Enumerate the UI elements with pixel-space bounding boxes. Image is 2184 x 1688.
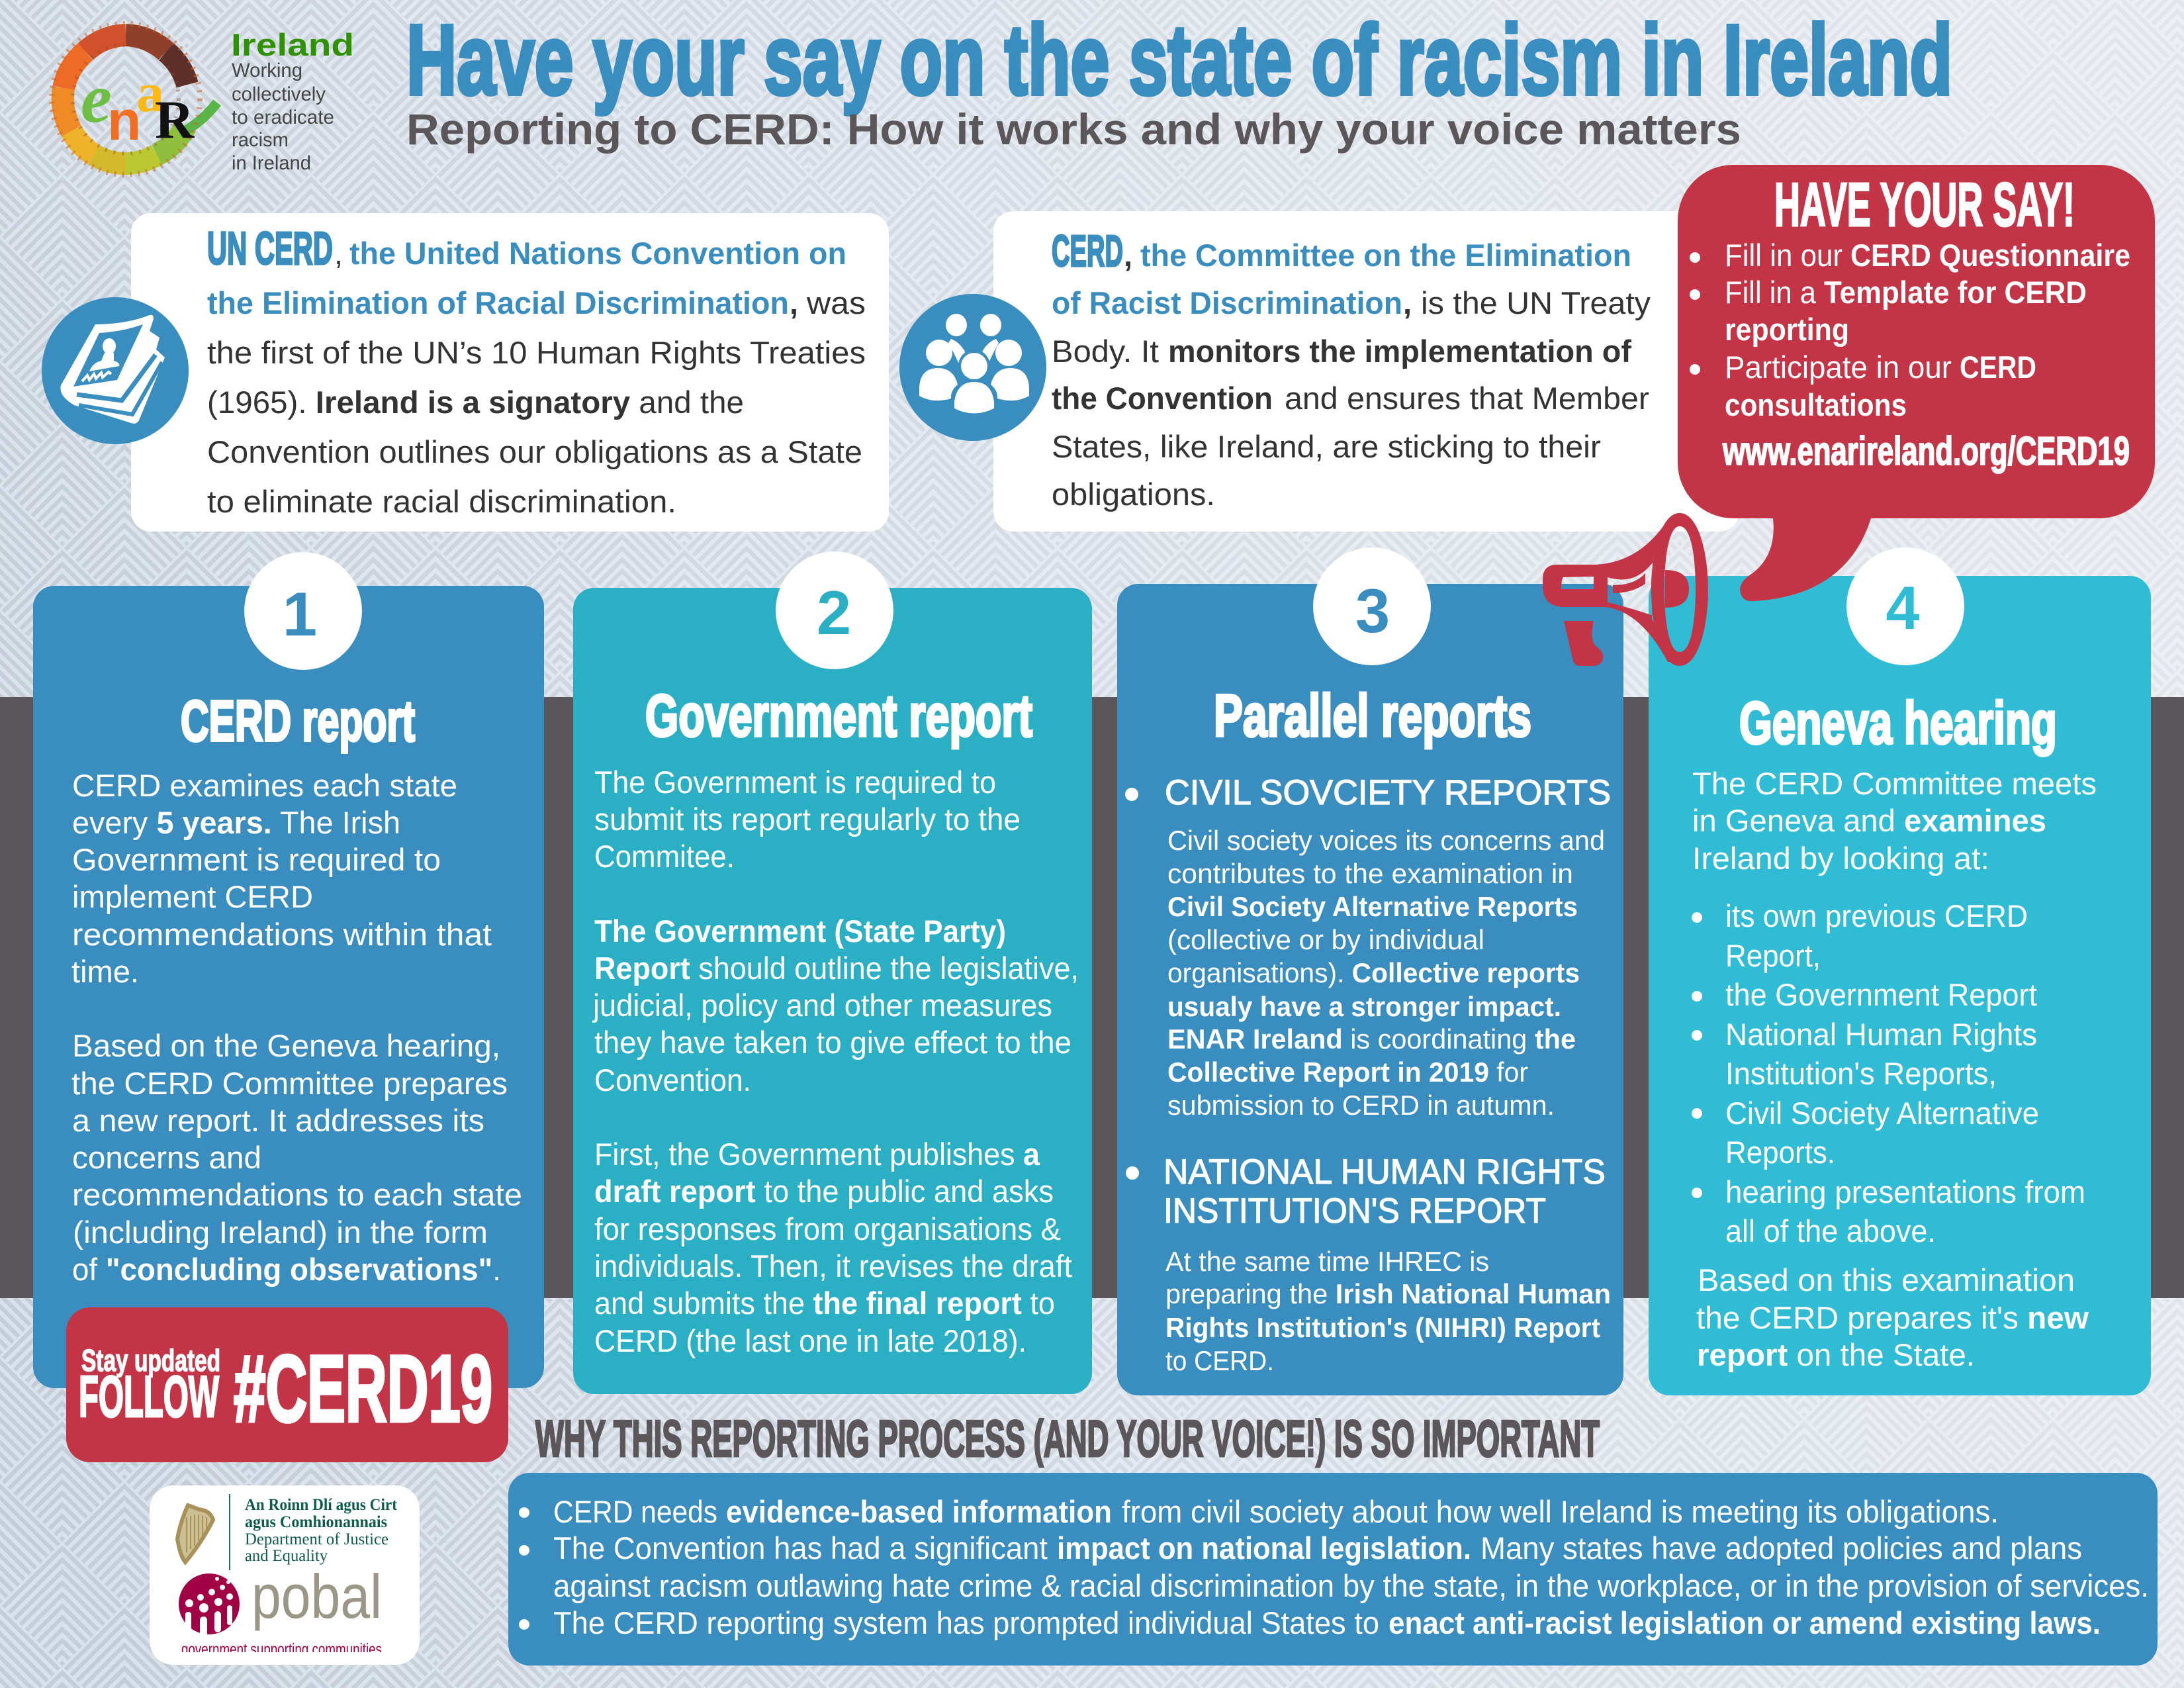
number badge 1: 1 [283,579,317,649]
panel: CERD committee intro: States, like Ireland, are sticking to their [1052,429,1601,464]
icon: harp [177,1505,213,1562]
heading: CERD report: CERD report [181,689,415,753]
text: Department of Justice and Equality: An Roinn Dlí agus Cirt [245,1496,398,1514]
text: Government report body: Report should outline the legislative, [594,951,1079,986]
panel: UN CERD intro: Convention outlines our obligations as a State [207,434,862,469]
panel 2: Government report [573,588,1092,1394]
text: Geneva outcome: report on the State. [1697,1337,1975,1372]
list: what is examined: the Government Report [1725,977,2037,1012]
logo: ENAR Ireland [52,24,354,175]
list: what is examined: all of the above. [1725,1213,1936,1248]
text: CERD report body: Based on the Geneva hearing, [72,1028,500,1063]
panel: CERD committee intro: CERD [1052,226,1123,276]
panel: CERD committee intro: Body. It [1052,334,1159,369]
panel: UN CERD intro: , [790,285,798,320]
panel: why it is important: against racism outlawing hate crime & racial discrimination by the state, in the workplace, or in the provision of services. [553,1568,2149,1603]
number badge 4: 4 [1886,575,1920,642]
text: civil society reports: usualy have a stronger impact. [1167,991,1561,1022]
logo letters [81,60,195,152]
text: Geneva intro [1692,766,2097,876]
panel: why it is important: impact on national legislation. [1057,1530,1471,1566]
callout: have your say speech bubble: Fill in a [1725,275,1817,310]
icon: megaphone [1543,513,1708,666]
text: Department of Justice and Equality: and Equality [245,1547,328,1565]
panel: UN CERD intro: the first of the UN’s 10 Human Rights Treaties [207,335,866,370]
panel: CERD committee intro: the Convention [1052,381,1273,416]
text: Government report body: draft report to the public and asks [594,1174,1054,1209]
callout: follow #CERD19: Stay updated [81,1343,220,1378]
panel 4: Geneva hearing [1649,576,2151,1395]
text: national human rights institution report: NATIONAL HUMAN RIGHTS [1163,1152,1606,1192]
panel: CERD committee intro: obligations. [1052,477,1215,512]
text: national human rights institution report: INSTITUTION'S REPORT [1163,1192,1546,1231]
text: CERD report body: (including Ireland) in the form [73,1215,488,1250]
callout: follow #CERD19: FOLLOW [79,1364,219,1429]
icon: pobal emblem [179,1573,240,1636]
heading: Parallel reports: Parallel reports [1214,683,1531,749]
text: Government report body: and submits the the final report to [594,1286,1055,1321]
text: Government report body [592,765,1079,1358]
text: Government report body: The Government (State Party) [594,914,1006,949]
panel: CERD committee intro: , [1403,285,1412,320]
text: civil society reports: ENAR Ireland is coordinating the [1167,1023,1576,1055]
text: civil society reports: submission to CERD in autumn. [1167,1090,1555,1121]
text: Geneva outcome [1696,1262,2089,1372]
callout: have your say speech bubble: consultations [1725,387,1907,422]
text: Government report body: First, the Government publishes a [594,1137,1040,1172]
list: what is examined: hearing presentations from [1725,1174,2085,1209]
text: civil society reports: CIVIL SOVCIETY REPORTS [1165,773,1611,812]
logo wordmark: Working [232,60,302,81]
text: national human rights institution report: At the same time IHREC is [1165,1246,1489,1277]
list: what is examined [1692,898,2085,1248]
text: Geneva intro: The CERD Committee meets [1692,766,2097,801]
text: CERD report body [71,768,522,1287]
callout: have your say speech bubble [1678,165,2155,601]
text: Government report body: for responses from organisations & [594,1211,1061,1246]
text: national human rights institution report: to CERD. [1165,1345,1274,1376]
panel: why it is important [508,1473,2158,1665]
number badge 2 [776,551,893,669]
panel: why it is important: CERD needs [553,1494,717,1529]
text: CERD report body: every 5 years. The Irish [72,805,400,840]
divider [229,1494,230,1570]
text: Government report body: Convention. [594,1062,751,1098]
panel 3: Parallel reports [1117,584,1623,1395]
panel: why it is important: Many states have adopted policies and plans [1480,1530,2082,1566]
callout: follow #CERD19 [66,1307,508,1462]
panel: CERD committee intro: and ensures that Member [1285,381,1649,416]
text: civil society reports: Civil society voices its concerns and [1167,825,1605,856]
icon: treaty documents [42,297,189,444]
panel: UN CERD intro: was [806,285,866,320]
text: CERD report body: time. [71,954,139,989]
text: Geneva intro: in Geneva and examines [1692,803,2046,838]
callout: have your say speech bubble: reporting [1725,312,1849,347]
text: CERD report body: concerns and [72,1140,261,1175]
logo letters: a [136,62,164,124]
panel: CERD committee intro: is the UN Treaty [1421,285,1651,320]
panel: CERD committee intro: of Racist Discrimination [1052,285,1402,320]
heading: Geneva hearing: Geneva hearing [1739,690,2057,757]
panel: CERD committee intro: monitors the implementation of [1168,334,1631,369]
text: CERD report body: Government is required to [72,842,441,877]
panel: UN CERD intro: (1965). Ireland is a signatory and the [207,385,744,420]
text: civil society reports: (collective or by individual [1167,924,1484,955]
number badge 4 [1846,547,1964,665]
panel: why it is important: The Convention has had a significant [553,1530,1048,1566]
number badge 3 [1313,547,1431,665]
logo wordmark [231,27,354,174]
logo wordmark: collectively [232,83,326,105]
text: civil society reports: contributes to the examination in [1167,858,1573,889]
text: Department of Justice and Equality [245,1496,398,1565]
list: what is examined: Report, [1725,938,1821,973]
panel: why it is important: evidence-based information [726,1494,1112,1529]
text: CERD report body: implement CERD [72,879,313,914]
text: Government report body: CERD (the last one in late 2018). [594,1323,1026,1358]
logo letters: n [107,89,141,152]
text: Geneva outcome: the CERD prepares it's new [1696,1300,2089,1335]
number badge 1 [244,552,362,670]
text: Government report body: judicial, policy and other measures [592,988,1052,1023]
text: national human rights institution report [1126,1152,1611,1376]
panel: funder logos [150,1485,420,1665]
panel: UN CERD intro: to eliminate racial discrimination. [207,484,676,519]
text: Geneva outcome: Based on this examination [1698,1262,2075,1297]
panel: why it is important: from civil society about how well Ireland is meeting its obligations. [1122,1494,1999,1529]
number badge 2: 2 [817,578,851,647]
text: Government report body: individuals. Then, it revises the draft [594,1248,1072,1284]
list: what is examined: its own previous CERD [1725,898,2028,933]
logo letters: e [81,60,112,137]
icon: group of people [899,294,1046,441]
text: civil society reports [1125,773,1611,1121]
text: CERD report body: the CERD Committee prepares [71,1066,508,1101]
list: what is examined: Reports. [1725,1135,1835,1170]
text: national human rights institution report: Rights Institution's (NIHRI) Report [1165,1312,1600,1343]
logo wordmark: racism [232,129,289,151]
text: Government report body: submit its report regularly to the [594,802,1021,837]
panel: UN CERD intro: the United Nations Convention on [349,236,846,271]
text: national human rights institution report: preparing the Irish National Human [1165,1278,1611,1309]
logo text: pobal: pobal [251,1562,382,1631]
panel 1: CERD report [33,586,544,1388]
text: Department of Justice and Equality: agus Comhionannais [245,1513,387,1531]
subtitle: Reporting to CERD: How it works and why your voice matters [406,105,1741,154]
text: CERD report body: of "concluding observations". [72,1252,501,1287]
number badge 3: 3 [1355,576,1390,645]
list: what is examined: Civil Society Alternative [1725,1096,2039,1131]
callout: have your say speech bubble: Template for CERD [1824,275,2087,310]
panel: CERD committee intro: , [1124,238,1132,273]
panel: CERD committee intro [993,211,1739,532]
callout: have your say speech bubble: Participate in our [1725,350,1952,385]
text: Government report body: Commitee. [594,839,735,874]
logo wordmark: to eradicate [232,107,334,128]
text: CERD report body: a new report. It addresses its [72,1103,484,1138]
panel: UN CERD intro: UN CERD [207,222,333,274]
panel: why it is important: enact anti-racist legislation or amend existing laws. [1388,1605,2101,1640]
dark horizontal band [0,697,2184,1298]
panel: CERD committee intro: the Committee on the Elimination [1140,238,1631,273]
text: civil society reports: organisations). Collective reports [1167,957,1580,988]
panel: UN CERD intro: the Elimination of Racial Discrimination [207,285,789,320]
text: Geneva intro: Ireland by looking at: [1692,841,1989,876]
text: CERD report body: recommendations to each state [72,1177,522,1212]
callout: have your say speech bubble: CERD Questionnaire [1850,238,2130,273]
logo wordmark: Ireland [231,27,354,62]
text: Government report body: The Government is required to [594,765,996,800]
panel: why it is important: The CERD reporting system has prompted individual States to [553,1605,1379,1640]
logo letters: R [155,89,195,150]
heading: Government report: Government report [645,683,1032,749]
callout: have your say speech bubble: CERD [1960,350,2036,385]
panel: UN CERD intro [131,213,889,532]
text: civil society reports: Civil Society Alternative Reports [1167,891,1578,922]
text: civil society reports: Collective Report in 2019 for [1167,1056,1528,1088]
text: government supporting communities: government supporting communities [181,1640,382,1659]
list: what is examined: National Human Rights [1725,1017,2037,1052]
logo wordmark: in Ireland [232,152,311,174]
panel: UN CERD intro: , [334,236,343,271]
text: Department of Justice and Equality: Department of Justice [245,1530,388,1548]
logo ring [52,24,217,175]
text: Government report body: they have taken to give effect to the [594,1025,1071,1060]
text: CERD report body: recommendations within that [72,917,492,952]
callout: follow #CERD19: #CERD19 [234,1336,492,1442]
text: CERD report body: CERD examines each state [72,768,457,803]
list: what is examined: Institution's Reports, [1725,1056,1997,1091]
callout: have your say speech bubble: Fill in our [1725,238,1843,273]
